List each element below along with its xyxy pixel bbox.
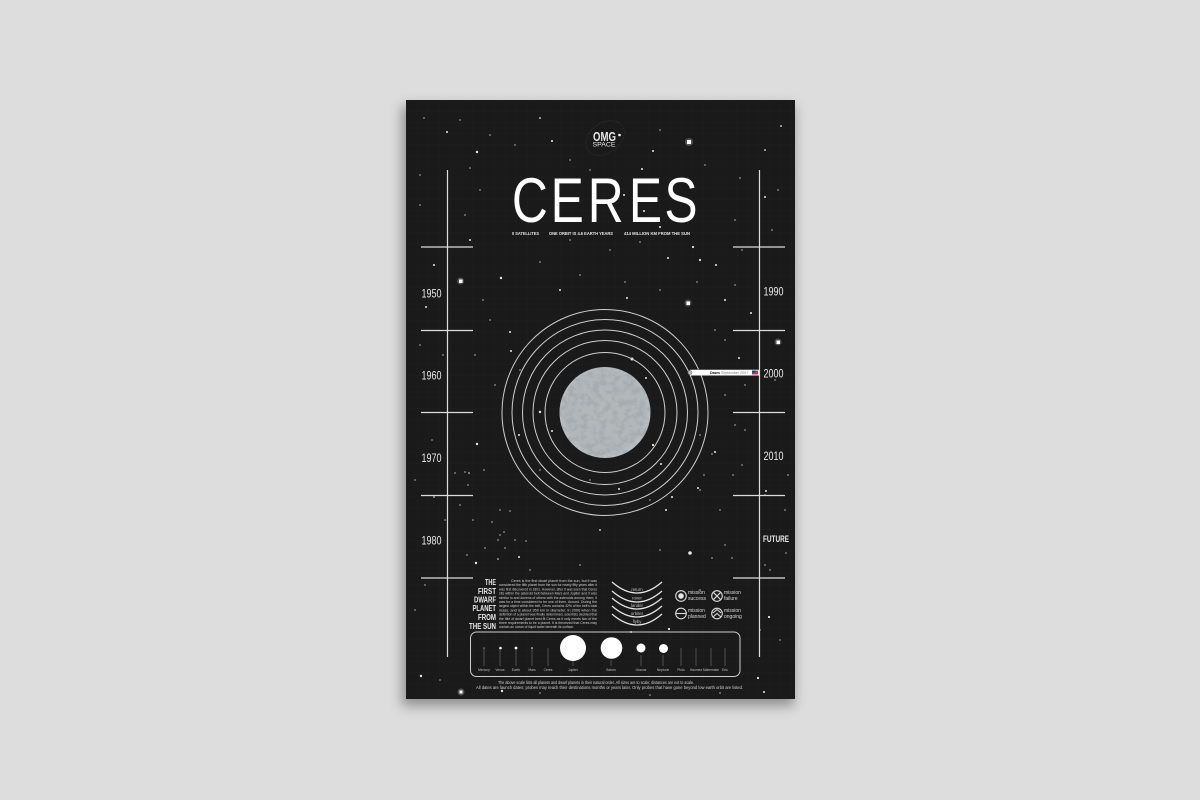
mission: Dawn: September 2007: [721, 371, 748, 375]
mission: Dawn: Dawn: [710, 371, 721, 375]
footnote: The above scale lists all planets and dwarf planets in their natural order. All sizes are to scale; distances are not to scale.: [498, 680, 694, 685]
label: mission failure: failure: [724, 596, 738, 602]
planet names: Jupiter: [568, 668, 579, 672]
body text: the title of dwarf planet best fit Ceres as it only meets two of the: [499, 617, 597, 621]
timeline right year labels: FUTURE: [763, 534, 789, 545]
body text: three requirements to be a planet. It is theorized that Ceres may: [499, 621, 597, 625]
label: mission planned: mission: [688, 608, 705, 614]
label: mission success: mission: [688, 590, 705, 596]
planet names: Makemake: [703, 668, 719, 672]
poster panel: [406, 100, 795, 699]
planet Ceres: [560, 367, 650, 458]
body text: was first discovered in 1801. However, after it was seen that Ceres: [499, 587, 597, 591]
body text: sits within the asteroid belt between Mars and Jupiter and it was: [499, 592, 597, 596]
heading: the first dwarf planet: DWARF: [474, 596, 496, 604]
heading: the first dwarf planet: FROM: [478, 613, 496, 622]
body text: largest object within the belt, Ceres contains 32% of the belt's total: [499, 604, 597, 608]
timeline right: [733, 170, 785, 657]
planet names: Uranus: [636, 668, 647, 672]
scale of planets panel: [470, 632, 740, 676]
legend: probe types: lander: [631, 603, 644, 608]
footnote: [476, 680, 743, 690]
legend: mission status: [676, 590, 742, 620]
timeline left year labels: 1960: [422, 368, 442, 382]
heading: the first dwarf planet: [469, 578, 496, 631]
planet names: Mercury: [478, 668, 490, 672]
timeline left year labels: 1980: [422, 534, 442, 548]
timeline left year labels: 1970: [422, 451, 442, 465]
label: mission ongoing: ongoing: [724, 614, 742, 620]
planet names: Ceres: [544, 668, 553, 672]
legend: probe types: [612, 582, 662, 625]
legend: probe types: rover: [632, 596, 642, 600]
icon: mission success: [676, 591, 686, 601]
planet names: Neptune: [657, 668, 669, 672]
planet names: [478, 668, 728, 672]
planet names: Venus: [495, 668, 505, 672]
icon: mission planned: [676, 608, 686, 619]
subtitle facts: 414 MILLION KM FROM THE SUN: [624, 231, 690, 236]
footnote: All dates are launch dates; probes may reach their destinations months or years later. Only probes that have gone beyond low earth orbit are listed.: [476, 685, 743, 690]
icon: mission failure: [712, 591, 722, 601]
orbit rings: [502, 310, 708, 516]
body text: [499, 579, 597, 629]
body text: Ceres is the first dwarf planet from the sun, but it was: [511, 579, 597, 583]
planet names: Eris: [722, 668, 728, 672]
label: mission success: success: [688, 596, 707, 602]
heading: the first dwarf planet: THE SUN: [469, 622, 496, 631]
planet names: Earth: [512, 668, 520, 672]
body text: mass, and is about 950 km in diameter. In 2006 when the: [499, 608, 597, 612]
timeline left year labels: [422, 286, 442, 548]
mission: Dawn: [688, 370, 759, 376]
timeline left year labels: 1950: [422, 286, 442, 300]
body text: similar to and dozens of others with the asteroids among them, it: [499, 596, 597, 600]
planet stems: [484, 648, 725, 666]
logo: OMG Space: SPACE: [592, 142, 616, 148]
planet names: Saturn: [606, 668, 616, 672]
heading: the first dwarf planet: FIRST: [478, 587, 496, 596]
body text: considered the fifth planet from the sun for nearly fifty years after it: [499, 583, 597, 587]
body text: definition of a planet was finally determined, scientists decided that: [499, 613, 597, 617]
subtitle facts: ONE ORBIT IS 4.6 EARTH YEARS: [549, 231, 613, 236]
poster shadow: [402, 106, 794, 706]
timeline right year labels: 2010: [764, 449, 784, 463]
timeline right year labels: 2000: [764, 366, 784, 380]
subtitle facts: [512, 231, 690, 236]
heading: the first dwarf planet: THE: [485, 578, 496, 587]
star field: [414, 117, 789, 696]
title: CERES: [512, 167, 698, 236]
timeline right year labels: 1990: [764, 284, 784, 298]
planet names: Mars: [528, 668, 536, 672]
subtitle facts: 0 SATELLITES: [512, 231, 539, 236]
icon: mission ongoing: [712, 608, 722, 619]
logo: OMG Space: OMG: [593, 129, 616, 144]
legend: probe types: flyby: [633, 619, 642, 624]
planet names: Pluto: [677, 668, 685, 672]
body text: was for a time considered to be one of them. Around. During the: [499, 600, 597, 604]
heading: the first dwarf planet: PLANET: [472, 604, 496, 613]
timeline right year labels: [763, 284, 789, 545]
label: mission failure: mission: [724, 590, 741, 596]
planets to scale: [484, 635, 668, 661]
legend: probe types: orbiter: [631, 611, 644, 616]
label: mission planned: planned: [688, 614, 706, 620]
legend: probe types: return: [631, 587, 643, 592]
planet names: Haumea: [690, 668, 702, 672]
logo: OMG Space: [579, 114, 631, 162]
label: mission ongoing: mission: [724, 608, 741, 614]
body text: contain an ocean of liquid water beneath its surface.: [499, 625, 574, 629]
timeline left: [421, 170, 473, 657]
